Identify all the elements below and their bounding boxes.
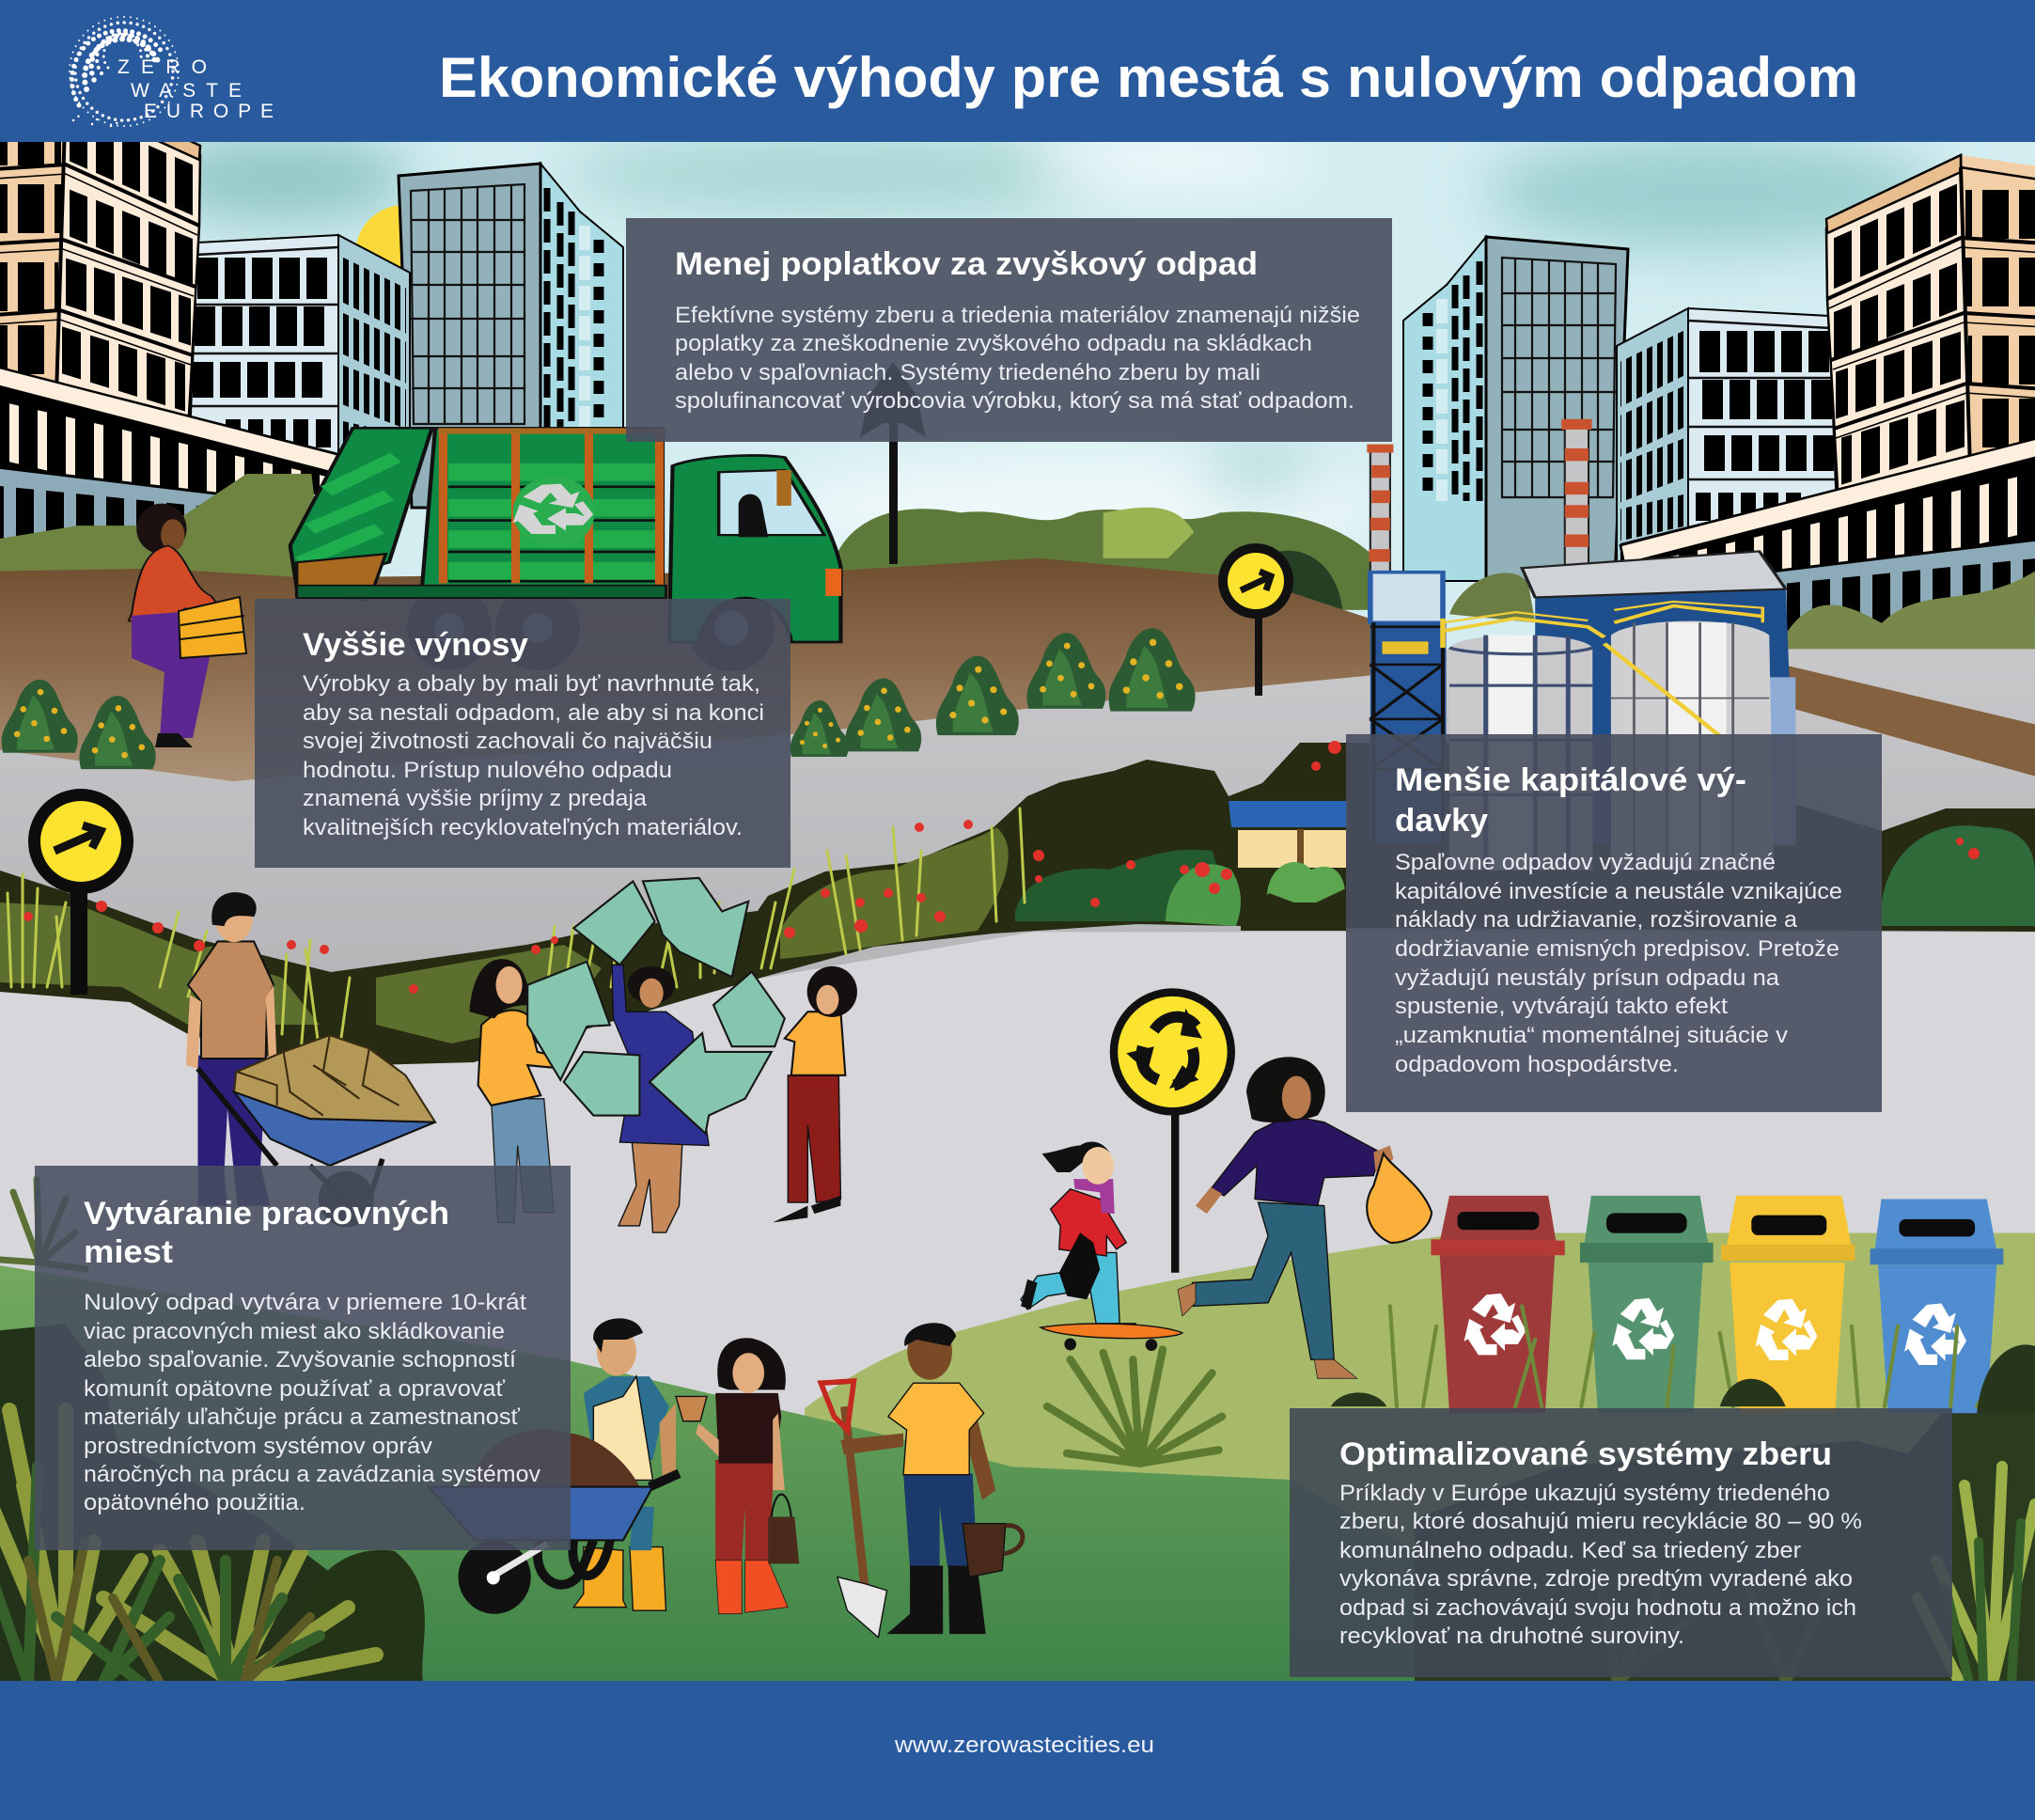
logo wordmark: EUROPE <box>144 101 274 122</box>
pond and hut <box>1229 801 1349 931</box>
mid bush band <box>0 741 2035 1067</box>
bush by plant <box>1449 573 1535 622</box>
tank right <box>1611 621 1774 871</box>
body text: komunít opätovne používať a opravovať <box>84 1376 506 1402</box>
bin: green <box>1580 1196 1714 1413</box>
right roadside bush <box>1882 825 2035 926</box>
dark bottom-left undergrowth <box>0 1324 327 1681</box>
woman with recycle sign, left <box>469 959 567 1222</box>
logo dot sphere <box>70 17 179 126</box>
truck rear hopper <box>290 428 431 600</box>
woman right of sign <box>773 966 857 1222</box>
panel: job creation <box>35 1166 571 1550</box>
body text: náklady na udržiavanie, rozširovanie a <box>1395 907 1797 933</box>
right brown slope <box>1789 666 2035 777</box>
body text: materiály uľahčuje prácu a zamestnanosť <box>84 1404 521 1430</box>
body text <box>675 303 1360 414</box>
body text: vyžadujú neustály prísun odpadu na <box>1395 965 1779 991</box>
body text: odpadovom hospodárstve. <box>1395 1052 1679 1077</box>
body text: Výrobky a obaly by mali byť navrhnuté tak, <box>303 671 760 697</box>
logo wordmark: WASTE <box>131 80 242 102</box>
panel: lower residual fees <box>626 218 1392 442</box>
body text: kvalitnejších recyklovateľných materiálov. <box>303 815 743 840</box>
green meadow <box>0 1265 1428 1681</box>
yellow-dotted bushes <box>2 628 1196 769</box>
roadside agave <box>1047 1350 1222 1464</box>
body text: odpad si zachovávajú svoju hodnotu a možno ich <box>1339 1595 1856 1621</box>
panel: higher revenues <box>255 599 791 868</box>
terrain back <box>0 474 2035 1416</box>
body text: zberu, ktoré dosahujú mieru recyklácie 80 – 90 % <box>1339 1509 1862 1534</box>
woman top <box>129 545 221 621</box>
sign: hill arrow <box>1218 543 1293 696</box>
woman with yellow crate <box>129 504 221 621</box>
heading <box>1395 762 1746 839</box>
body text: prostredníctvom systémov opráv <box>84 1434 433 1459</box>
shrubs behind hill <box>0 474 2035 701</box>
lower road <box>0 932 2035 1416</box>
body text: svojej životnosti zachovali čo najväčšiu <box>303 729 712 754</box>
heading: Optimalizované systémy zberu <box>1339 1436 1832 1472</box>
body text <box>1339 1481 1862 1649</box>
people left group <box>186 878 1023 1638</box>
yellow railings <box>1443 602 1762 736</box>
garbage truck <box>290 428 841 671</box>
girl on skateboard <box>1021 1141 1182 1351</box>
heading: miest <box>84 1234 173 1270</box>
woman in blue dress <box>612 965 709 1232</box>
body text: alebo v spaľovniach. Systémy triedeného zberu by mali <box>675 360 1260 385</box>
woman with bag <box>1178 1057 1432 1378</box>
power plant <box>1367 419 1795 871</box>
olive shrubs left <box>0 902 602 1043</box>
body text: „uzamknutia“ momentálnej situácie v <box>1395 1023 1789 1048</box>
foreground grasses by bins <box>1390 1306 2003 1406</box>
body text: aby sa nestali odpadom, ale aby si na konci <box>303 700 764 726</box>
body text: Efektívne systémy zberu a triedenia materiálov znamenajú nižšie <box>675 303 1360 328</box>
left buildings <box>0 142 624 539</box>
body text: náročných na prácu a zavádzania systémov <box>84 1462 541 1487</box>
tower scaffold <box>1370 573 1447 845</box>
woman head <box>136 504 187 554</box>
olive hump <box>805 1233 2035 1681</box>
terrain front <box>0 1233 2035 1681</box>
body text: viac pracovných miest ako skládkovanie <box>84 1319 505 1344</box>
roundabout sign <box>1110 988 1235 1273</box>
heading: Menej poplatkov za zvyškový odpad <box>675 246 1258 282</box>
post behind top panel <box>860 362 926 564</box>
body text <box>303 671 764 840</box>
heading: davky <box>1395 803 1488 839</box>
large recycling symbol <box>527 878 785 1134</box>
dark bush shade <box>1015 850 1231 921</box>
dark undergrowth behind lower panel <box>1415 1363 2035 1681</box>
red flowers <box>23 741 1980 994</box>
chimney left <box>1367 445 1393 585</box>
body text: poplatky za zneškodnenie zvyškového odpadu na skládkach <box>675 331 1312 356</box>
base road <box>0 649 2035 1298</box>
bin: red <box>1431 1196 1565 1413</box>
body text <box>1395 850 1842 1077</box>
truck cab <box>669 455 841 642</box>
road signs <box>28 362 1293 995</box>
man with wheelbarrow <box>186 892 277 1206</box>
sun <box>356 205 400 267</box>
truck wheels <box>407 585 775 671</box>
gardeners: man with apron <box>573 1318 676 1610</box>
bin: yellow <box>1721 1196 1855 1413</box>
truck body <box>422 428 666 588</box>
logo <box>70 17 274 126</box>
body text: kapitálové investície a neustále vznikajúce <box>1395 879 1842 904</box>
chimney right <box>1561 419 1592 568</box>
body text: znamená vyššie príjmy z predaja <box>303 786 647 811</box>
grass tufts <box>8 808 1025 1058</box>
brown hill <box>0 558 1376 781</box>
title: Ekonomické výhody pre mestá s nulovým odpadom <box>439 46 1858 109</box>
body text: komunálneho odpadu. Keď sa triedený zber <box>1339 1538 1801 1563</box>
tank left <box>1449 635 1592 871</box>
heading: Vyššie výnosy <box>303 627 528 663</box>
body text: spolufinancovať výrobcovia výrobku, ktorý sa má stať odpadom. <box>675 388 1354 414</box>
body text <box>84 1290 541 1515</box>
header band <box>0 0 2035 142</box>
body text: Nulový odpad vytvára v priemere 10-krát <box>84 1290 526 1315</box>
truck recycle emblem <box>512 477 595 548</box>
right buildings <box>1403 155 2035 731</box>
panel: lower capital expenditure <box>1346 734 1882 1112</box>
logo wordmark: ZERO <box>117 56 207 78</box>
yellow crate <box>179 597 246 658</box>
woman boots <box>155 733 193 747</box>
gardeners: man with shovel <box>821 1323 1023 1638</box>
body text: vykonáva správne, zdroje predtým vyradené ako <box>1339 1566 1853 1592</box>
body text: hodnotu. Prístup nulového odpadu <box>303 758 672 783</box>
footer band <box>0 1681 2035 1820</box>
wheelbarrow with boxes <box>197 1035 435 1227</box>
body text: Príklady v Európe ukazujú systémy triedeného <box>1339 1481 1830 1506</box>
body text: dodržiavanie emisných predpisov. Pretože <box>1395 936 1839 962</box>
sky <box>196 142 2035 649</box>
left foreground spiky plants <box>0 1179 425 1683</box>
bushes by bins <box>1331 1344 2035 1413</box>
logo wordmark <box>117 56 274 122</box>
footer url: www.zerowastecities.eu <box>894 1733 1154 1758</box>
body text: Spaľovne odpadov vyžadujú značné <box>1395 850 1776 875</box>
lower right foreground plants <box>1598 1467 2035 1683</box>
people right group <box>1021 988 2035 1464</box>
heading <box>84 1196 449 1270</box>
gardeners: woman with pot <box>676 1338 799 1614</box>
plant building <box>1522 551 1795 845</box>
bin: blue <box>1871 1199 2003 1413</box>
heading: Menšie kapitálové vý- <box>1395 762 1746 798</box>
body text: recyklovať na druhotné suroviny. <box>1339 1624 1684 1649</box>
panel: optimised collection systems <box>1290 1408 1952 1677</box>
woman purple trousers <box>132 611 211 738</box>
sign: left arrow <box>28 789 133 995</box>
truck frame <box>297 586 666 598</box>
body text: alebo spaľovanie. Zvyšovanie schopností <box>84 1347 516 1373</box>
body text: opätovného použitia. <box>84 1490 305 1515</box>
gardeners: soil barrow <box>429 1429 680 1614</box>
bottom-left bush <box>282 1550 425 1683</box>
body text: spustenie, vytvárajú takto efekt <box>1395 994 1728 1019</box>
heading: Vytváranie pracovných <box>84 1196 449 1232</box>
